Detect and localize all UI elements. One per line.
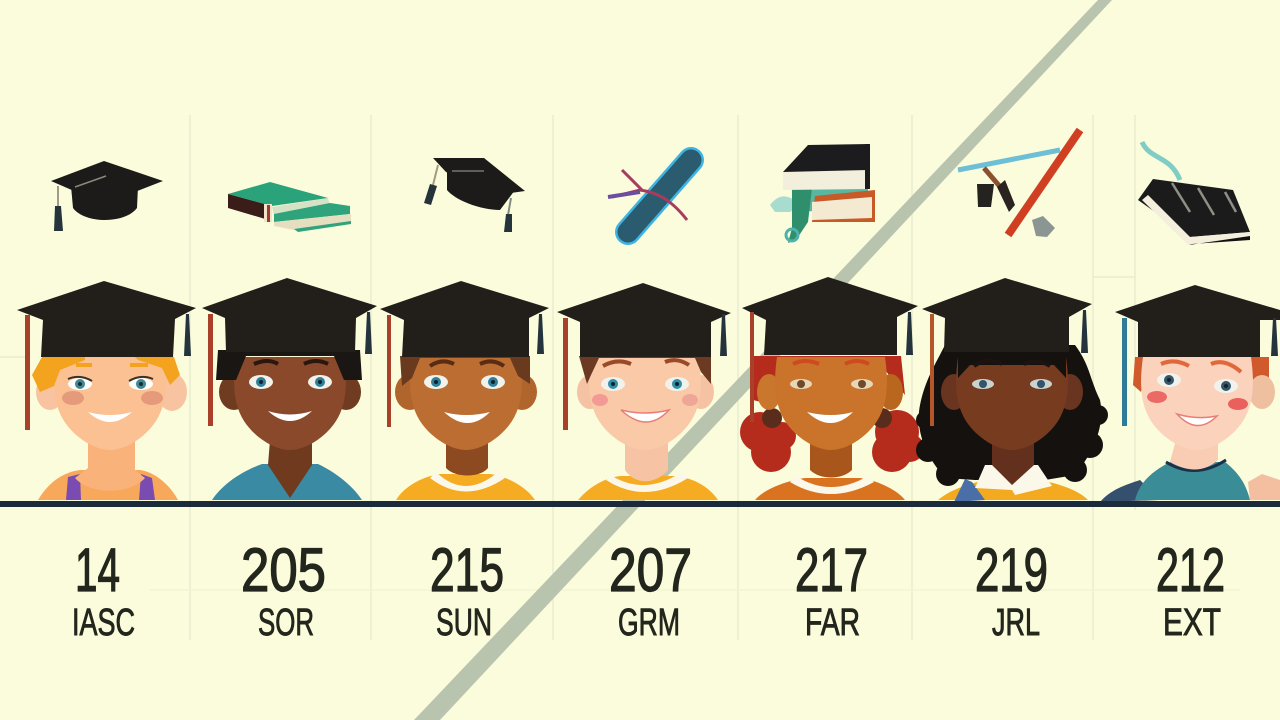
person 1: blond student (17, 281, 196, 500)
value and label: 217 FAR (795, 536, 868, 644)
value and label: 215 SUN (430, 536, 504, 644)
value and label: 14 IASC (72, 536, 135, 644)
icon: graduation cap (51, 161, 163, 231)
value and label: 207 GRM (609, 536, 692, 644)
pigtails (740, 408, 924, 472)
icon: tilted graduation cap (424, 158, 525, 232)
value and label: 219 JRL: 219 (975, 536, 1048, 604)
value and label: 207 GRM: 207 (609, 536, 692, 604)
value and label: 217 FAR: FAR (805, 602, 860, 644)
value and label: 205 SOR: SOR (258, 602, 314, 644)
icon: pencil, ruler and tools (958, 130, 1080, 237)
diagonal band (414, 0, 1112, 720)
value and label: 219 JRL: JRL (992, 602, 1040, 644)
person 5: girl with red pigtails (740, 277, 924, 500)
person 6: girl with curly black hair (916, 278, 1108, 502)
value and label: 212 EXT (1156, 536, 1225, 644)
person 3: brown-skinned boy in yellow (380, 281, 549, 500)
person 7: red-haired student in teal (1100, 285, 1280, 502)
person 4: light-skinned boy in yellow (557, 283, 731, 500)
icon: stacked books (770, 144, 875, 243)
value and label: 215 SUN: 215 (430, 536, 504, 604)
value and label: 212 EXT: EXT (1163, 602, 1221, 644)
value and label: 205 SOR: 205 (241, 536, 326, 604)
person 2: dark-skinned boy in teal (202, 278, 377, 500)
curly hair (916, 345, 1108, 486)
value and label: 215 SUN: SUN (436, 602, 492, 644)
value and label: 14 IASC: 14 (75, 536, 120, 604)
value and label: 14 IASC: IASC (72, 602, 135, 644)
value and label: 205 SOR (241, 536, 326, 644)
value and label: 217 FAR: 217 (795, 536, 868, 604)
icon: green books (228, 182, 351, 232)
icon: black book (1138, 142, 1250, 245)
value and label: 212 EXT: 212 (1156, 536, 1225, 604)
baseline axis (0, 501, 1280, 507)
icon: diploma scroll (608, 160, 691, 232)
value and label: 219 JRL (975, 536, 1048, 644)
value and label: 207 GRM: GRM (618, 602, 680, 644)
